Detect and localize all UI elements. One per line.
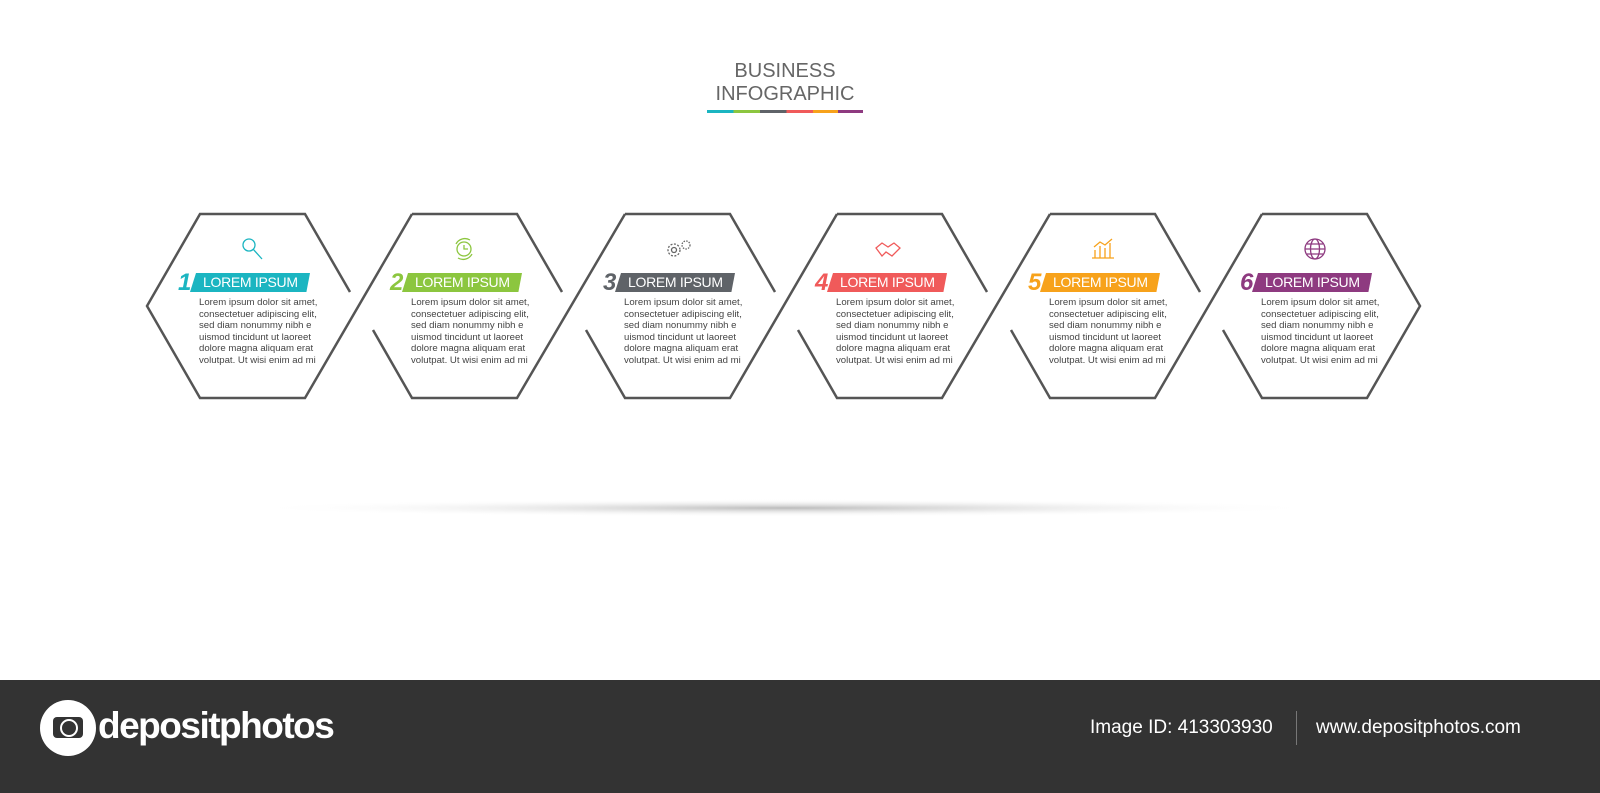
step 4: Lorem ipsum dolor sit amet, consectetuer adipiscing elit, sed diam nonummy nibh e uismod tincidunt ut laoreet dolore magna aliquam erat volutpat. Ut wisi enim ad mi [836,297,954,366]
icon: magnifier [243,239,262,259]
hex 2 [373,214,625,398]
step 3: Lorem ipsum dolor sit amet, consectetuer adipiscing elit, sed diam nonummy nibh e uismod tincidunt ut laoreet dolore magna aliquam erat volutpat. Ut wisi enim ad mi [624,297,742,366]
step 1: Lorem ipsum dolor sit amet, consectetuer adipiscing elit, sed diam nonummy nibh e uismod tincidunt ut laoreet dolore magna aliquam erat volutpat. Ut wisi enim ad mi [199,297,317,366]
step 3: LOREM IPSUM [628,274,723,290]
icon: clock [456,239,472,259]
step 6 [1240,269,1379,366]
footer bar: www.depositphotos.com [1316,717,1521,738]
hex 3 [586,214,837,398]
step 2: 2 [390,269,403,296]
step 4: 4 [815,269,828,296]
step 6: LOREM IPSUM [1265,274,1360,290]
step 4 [814,269,954,366]
hex 6 [1223,214,1420,398]
icon: globe [1305,239,1325,259]
url [1296,711,1297,745]
icon: bar chart [1092,239,1114,258]
title: INFOGRAPHIC [716,83,854,105]
step 2: LOREM IPSUM [415,274,510,290]
icon: camera logo [40,700,96,756]
step 6: Lorem ipsum dolor sit amet, consectetuer adipiscing elit, sed diam nonummy nibh e uismod tincidunt ut laoreet dolore magna aliquam erat volutpat. Ut wisi enim ad mi [1261,297,1379,366]
step 1 [178,269,317,366]
step 6: 6 [1240,269,1253,296]
title: BUSINESS [734,60,836,82]
step 5: Lorem ipsum dolor sit amet, consectetuer adipiscing elit, sed diam nonummy nibh e uismod tincidunt ut laoreet dolore magna aliquam erat volutpat. Ut wisi enim ad mi [1049,297,1167,366]
step 4: LOREM IPSUM [840,274,935,290]
step 1: 1 [178,269,191,296]
hex 1 [147,214,412,398]
image id: Image ID: 413303930 [1090,717,1273,738]
step 2: Lorem ipsum dolor sit amet, consectetuer adipiscing elit, sed diam nonummy nibh e uismod tincidunt ut laoreet dolore magna aliquam erat volutpat. Ut wisi enim ad mi [411,297,529,366]
footer bar [0,680,1600,793]
step 1: LOREM IPSUM [203,274,298,290]
title color bar [707,110,863,113]
step 2 [390,269,529,366]
hex 4 [798,214,1050,398]
step 5: LOREM IPSUM [1053,274,1148,290]
step 5 [1028,269,1167,366]
step 5: 5 [1028,269,1041,296]
icon: handshake [876,243,900,256]
icon: gears [668,241,690,256]
logo text: depositphotos [98,705,333,746]
title [707,60,863,113]
hex 5 [1011,214,1262,398]
step 3 [603,269,742,366]
shadow [245,499,1325,517]
step 3: 3 [603,269,616,296]
